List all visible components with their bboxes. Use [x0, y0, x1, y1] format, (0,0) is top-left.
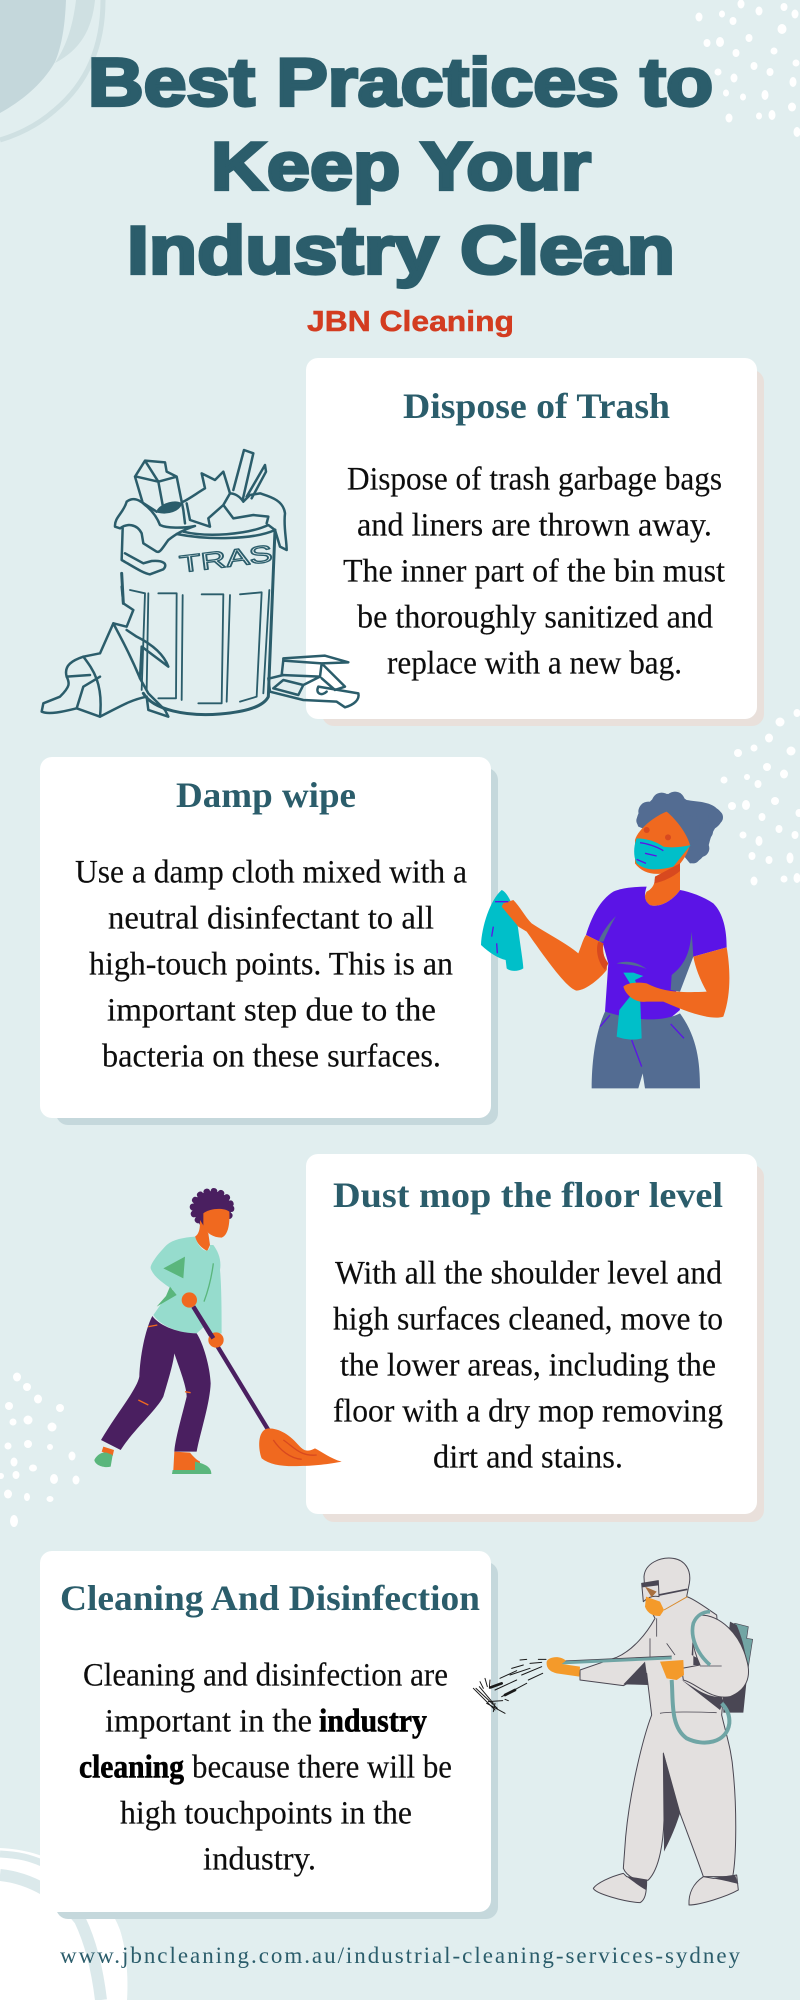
icon: spray droplets — [473, 1659, 546, 1713]
text: dispose of trash body — [343, 462, 725, 682]
heading: dispose of trash: Dispose of Trash — [403, 386, 670, 426]
text: cleaning and disinfection body: industry. — [203, 1842, 316, 1878]
title — [88, 44, 713, 288]
title: Industry Clean — [127, 212, 675, 288]
subtitle: JBN Cleaning: JBN Cleaning — [307, 306, 514, 338]
illustration: person mopping floor — [94, 1191, 342, 1474]
icon: overflowing trash can — [42, 450, 359, 717]
decoration: top-left brush circle — [0, 0, 103, 140]
text: cleaning and disinfection body: industry — [319, 1704, 427, 1740]
text: cleaning and disinfection body: Cleaning and disinfection are — [83, 1658, 448, 1694]
text: cleaning and disinfection body: high touchpoints in the — [120, 1796, 412, 1832]
text: dispose of trash body: and liners are thrown away. — [357, 508, 712, 544]
text: dispose of trash body: replace with a new bag. — [387, 646, 682, 682]
heading: cleaning and disinfection: Cleaning And Disinfection — [60, 1578, 480, 1618]
text: dust mop body: dirt and stains. — [433, 1440, 623, 1476]
text: dust mop body: high surfaces cleaned, move to — [333, 1302, 723, 1338]
title: Keep Your — [211, 128, 591, 204]
text: dispose of trash body: Dispose of trash garbage bags — [347, 462, 722, 498]
text: damp wipe body: neutral disinfectant to all — [108, 900, 434, 936]
text: dispose of trash body: be thoroughly sanitized and — [357, 600, 713, 636]
heading: dust mop: Dust mop the floor level — [333, 1175, 723, 1215]
text: damp wipe body: Use a damp cloth mixed with a — [75, 854, 467, 890]
text: dust mop body: the lower areas, including the — [340, 1348, 716, 1384]
icon: overflowing trash can: TRAS — [178, 540, 274, 579]
text: damp wipe body: bacteria on these surfaces. — [102, 1038, 441, 1074]
text: dust mop body — [333, 1256, 723, 1476]
icon: spray bottle — [617, 973, 643, 1040]
panel: dust mop the floor level — [306, 1154, 764, 1522]
decoration: bottom-left brush circle — [0, 1848, 127, 2000]
illustration: woman wiping with mask and spray bottle — [481, 792, 729, 1088]
text: dispose of trash body: The inner part of the bin must — [343, 554, 725, 590]
panel: damp wipe — [40, 757, 498, 1125]
text: cleaning and disinfection body — [79, 1658, 452, 1878]
panel: dispose of trash — [306, 358, 764, 726]
text: damp wipe body: important step due to the — [107, 992, 436, 1028]
text: cleaning and disinfection body: cleaning — [79, 1750, 184, 1786]
decoration: top-right dots — [696, 0, 800, 137]
text: cleaning and disinfection body: because there will be — [192, 1750, 452, 1786]
decoration: lower-left dots — [0, 1372, 80, 1527]
title: Best Practices to — [88, 44, 713, 120]
panel: cleaning and disinfection — [40, 1551, 498, 1919]
footer url: www.jbncleaning.com.au/industrial-cleaning-services-sydney — [60, 1943, 740, 1968]
text: damp wipe body — [75, 854, 467, 1074]
decoration: mid-right dots — [720, 709, 800, 886]
text: damp wipe body: high-touch points. This is an — [89, 946, 453, 982]
illustration: worker in protective suit spraying disinfectant — [473, 1558, 753, 1905]
text: dust mop body: floor with a dry mop removing — [333, 1394, 723, 1430]
heading: damp wipe: Damp wipe — [176, 775, 356, 815]
text: dust mop body: With all the shoulder level and — [335, 1256, 722, 1292]
text: cleaning and disinfection body: important in the — [105, 1704, 312, 1740]
